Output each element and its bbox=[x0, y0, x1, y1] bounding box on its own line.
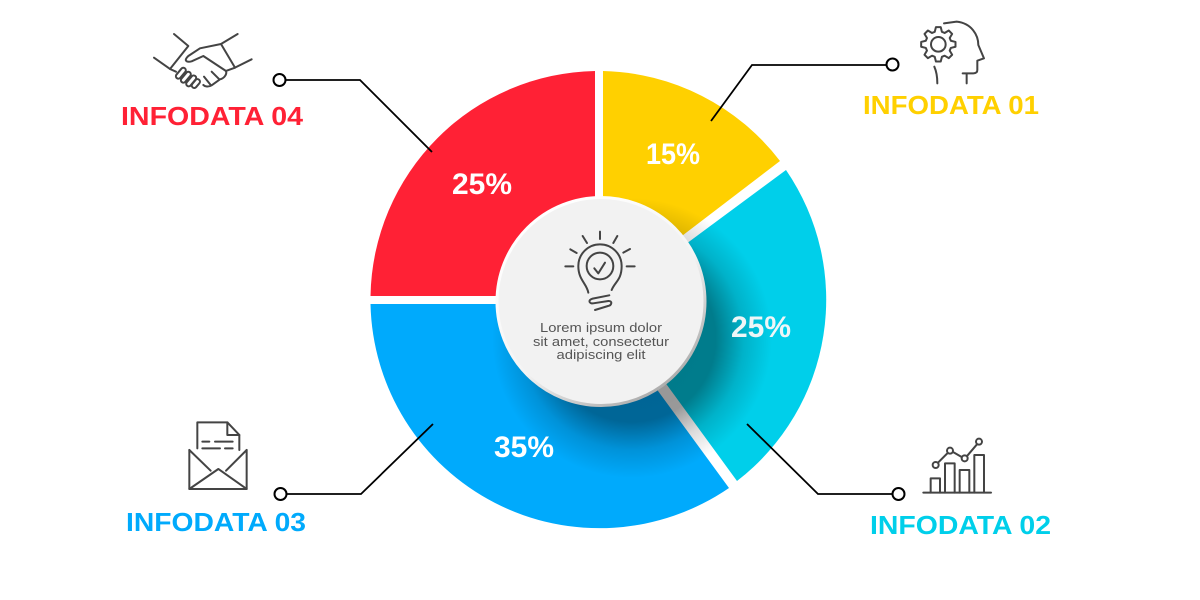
connector 01 bbox=[711, 65, 887, 121]
value: 25% cyan: 25% bbox=[731, 311, 791, 344]
icon: handshake bbox=[154, 34, 252, 89]
segment: red 25% bbox=[370, 71, 595, 296]
connector 03 bbox=[286, 424, 433, 494]
segment: cyan 25% bbox=[640, 170, 826, 481]
value: 35%: 35% bbox=[494, 431, 554, 464]
icon: head with gear bbox=[921, 22, 984, 83]
center circle bbox=[497, 198, 705, 406]
callout: infodata 02 bbox=[747, 424, 1051, 540]
icon: envelope with letter bbox=[189, 422, 247, 489]
label 03: INFODATA 03 bbox=[126, 507, 306, 537]
center shadow bbox=[492, 198, 772, 478]
infographic bbox=[122, 20, 1050, 534]
center text: sit amet, consectetur bbox=[533, 334, 670, 349]
value: 15%: 15% bbox=[646, 138, 700, 171]
connector dot 03 bbox=[274, 488, 286, 500]
label 02: INFODATA 02 bbox=[870, 510, 1051, 540]
label 04: INFODATA 04 bbox=[121, 101, 304, 131]
connector dot 02 bbox=[892, 488, 904, 500]
callout: infodata 01 bbox=[711, 22, 1039, 121]
donut chart bbox=[370, 71, 826, 528]
segment: yellow 15% bbox=[603, 71, 780, 268]
callout: infodata 04 bbox=[121, 34, 432, 152]
connector dot 04 bbox=[274, 74, 286, 86]
connector 02 bbox=[747, 424, 893, 494]
label 01: INFODATA 01 bbox=[863, 90, 1039, 120]
connector 04 bbox=[285, 80, 432, 152]
center text bbox=[533, 320, 670, 362]
value: 25% red: 25% bbox=[452, 168, 512, 201]
icon: light bulb bbox=[565, 232, 635, 310]
disc bbox=[497, 198, 705, 406]
segment: blue 35% bbox=[370, 304, 729, 528]
center text: adipiscing elit bbox=[556, 347, 646, 362]
icon: bar chart bbox=[923, 439, 991, 493]
callout: infodata 03 bbox=[126, 422, 433, 537]
center text: Lorem ipsum dolor bbox=[540, 320, 663, 335]
connector dot 01 bbox=[886, 58, 898, 70]
